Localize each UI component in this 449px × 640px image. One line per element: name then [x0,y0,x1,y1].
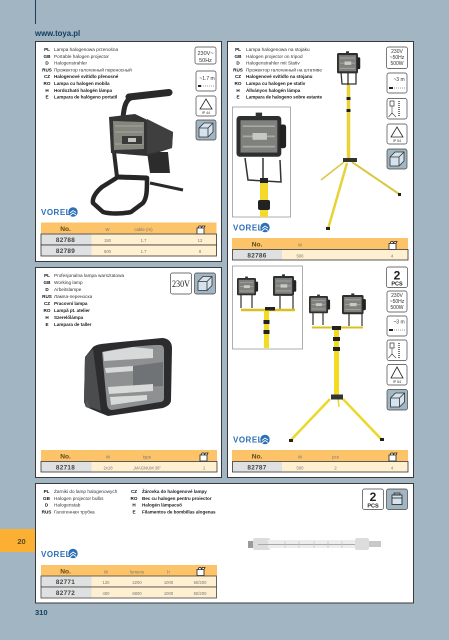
language list, right column [131,487,216,514]
table: 82787: No. [252,454,262,460]
language list: Halogenové svítidlo na stojanu [246,74,313,79]
icon: packaging box [196,120,216,140]
logo: VOREL: VOREL [233,436,263,444]
language list: H [236,88,240,93]
inset photo: lamp head [232,107,290,217]
language list: Állványos halogén lámpa [246,87,301,93]
table: 82787: W [298,454,303,460]
icon: 2 pcs: PCS [391,282,403,288]
language list [42,47,132,100]
table: 82771 / 82772: 1000 [164,580,174,585]
language list, right column: E [132,510,136,514]
section tab: 20 [0,529,35,552]
language list: RO [44,308,51,313]
language list, left column: RUS [42,510,51,514]
table: 82718: 1 [203,466,206,470]
table: 82718: „MAGNUM 36" [133,466,161,470]
language list: Halogenstrahler mit Stativ [246,60,300,66]
table: 82718: 82718 [56,464,75,472]
icon: cable length: ~1.7 m [199,76,215,82]
language list: Working lamp [54,280,83,285]
language list: Szerelőlámpa [54,315,84,320]
inset photo: twin lamp head [232,266,302,349]
table: 82787: 4 [391,466,394,470]
language list [42,273,124,327]
language list, right column: RO [131,496,138,501]
table: 82788 / 82789: cable (m) [134,227,153,232]
language list, left column: Żarniki do lamp halogenowych [54,488,118,494]
table: 82788 / 82789: W [105,227,110,232]
table: 82788 / 82789: 150 [104,238,112,243]
table: 82771 / 82772: 400 [102,591,110,596]
language list: E [45,322,49,327]
language list: E [45,94,49,100]
icon: voltage [387,291,407,312]
language list, left column: Галогенная трубка [54,510,95,514]
language list: RUS [42,68,52,72]
table: 82718 [41,450,217,472]
table: 82771 / 82772: 1000 [164,591,174,596]
icon: cable length: ~3 m [393,77,405,83]
language list: Halogen projector on tripod [246,54,303,59]
icon: 230V: 230V [172,279,190,289]
table: 82788 / 82789: 1.7 [141,238,147,243]
language list: Halogenstrahler [54,60,88,66]
icon: 2 pcs: PCS [367,504,379,510]
table: 82788 / 82789: 82788 [56,237,75,244]
logo: VOREL: VOREL [41,208,71,217]
panel: halogen bulbs [36,484,414,603]
icon: voltage: 230V [391,49,403,55]
language list: Lampa halogenowa na stojaku [246,47,310,52]
panel: portable halogen projector [36,42,222,262]
icon: IP54 [387,364,407,385]
table: 82788 / 82789: 82789 [56,248,75,255]
icon: voltage [195,47,216,64]
table: 82786: 4 [391,254,394,258]
table: 82788 / 82789: 1.7 [141,249,147,254]
language list: Лампа-переноска [54,294,93,299]
language list: Lampa cu halogen pe stativ [246,81,306,86]
icon: voltage: ~50Hz [390,55,405,61]
table: 82786: 82786 [247,252,267,260]
icon: voltage: 500W [390,61,404,67]
table: 82718: type [143,454,152,460]
product photo: portable projector [93,92,183,214]
icon: IP44: IP 54 [393,139,401,143]
product photo: halogen tube [248,538,381,550]
language list, left column [42,488,118,514]
product photo: work lamp [84,338,172,416]
language list: RUS [233,68,243,72]
language list: H [45,88,49,93]
table: 82771 / 82772: h [167,570,170,574]
language list: Lampara de taller [54,322,92,327]
language list: Lampa halogenowa przenośna [54,47,119,52]
page margin rule [34,0,36,24]
table: 82771 / 82772: lumens [130,570,145,574]
table: 82771 / 82772 [41,565,217,598]
table: 82787: 2 [334,466,337,470]
icon: 2 pcs: 2 [370,490,377,504]
table: 82788 / 82789: 12 [198,238,203,243]
table: 82771 / 82772: 120 [102,580,110,585]
icon: voltage: ~50Hz [390,299,405,305]
icon: packaging box [387,390,408,410]
language list, right column: Bec cu halogen pentru proiector [142,496,212,501]
language list: CZ [235,74,241,79]
table: 82788 / 82789: 8 [199,249,202,254]
language list, left column: PL [44,489,50,494]
icon: 2 pcs: 2 [394,268,401,282]
icon: voltage: 230V [391,293,403,299]
icon: height [387,340,407,360]
icon: cable length [387,316,407,336]
language list, right column: H [132,502,136,508]
language list, left column: D [45,502,49,508]
language list: Lampă pt. atelier [54,308,90,313]
language list: RUS [42,294,52,299]
language list, left column: Halogen projector bulbs [54,496,104,501]
table: 82787: 500 [296,466,304,470]
icon: IP44: IP 44 [202,111,210,115]
icon: 2 pcs [386,267,408,288]
language list: D [236,60,240,66]
icon: 230V [170,273,192,294]
language list, right column: Žárovka do halogenové lampy [142,487,207,494]
icon: packaging box [194,273,216,294]
product photo: twin tripod lamp [289,293,384,442]
language list, right column: Halogén lámpacső [142,502,182,508]
table: 82786: No. [252,242,262,248]
language list: Lampara de halogeno sobre estante [246,94,322,100]
language list: GB [44,280,51,285]
table: 82771 / 82772: 2200 [132,580,142,585]
table: 82788 / 82789: 500 [104,249,112,254]
table: 82787 [232,450,408,472]
icon: IP44 [387,124,407,144]
language list: Profesjonalna lampa warsztatowa [54,273,124,278]
language list, left column: Halogenstab [54,502,81,508]
language list: CZ [44,301,50,306]
page number: 310 [35,608,48,617]
language list [233,47,322,100]
language list: Hordozható halogén lámpa [54,88,112,93]
table: 82771 / 82772: 6800 [132,591,142,596]
panel: tripod lamps [228,42,414,478]
icon: IP54: IP 54 [393,380,401,384]
language list: Pracovní lampa [54,301,88,306]
table: 82771 / 82772: 82772 [56,590,75,597]
table: 82787: 82787 [247,464,267,472]
language list: RO [235,81,242,86]
language list: H [45,315,49,320]
icon: cable length: ~3 m [393,320,405,326]
icon: IP44 [196,96,216,116]
icon: voltage: 230V~ [197,51,214,57]
table: 82718: No. [60,454,71,460]
icon: packaging box [387,149,407,169]
language list: Arbeitslampe [54,287,82,292]
table: 82771 / 82772: 50/200 [194,591,207,596]
language list: CZ [44,74,50,79]
language list: E [236,94,240,100]
table: 82771 / 82772: 50/200 [194,580,207,585]
website heading: www.toya.pl [34,29,80,38]
language list: Прожектор галогенный на штативе [246,66,322,72]
logo: VOREL: VOREL [41,550,71,559]
language list: PL [235,47,241,52]
table: 82788 / 82789: No. [60,226,71,233]
language list: Halogenové svítidlo přenosné [54,74,119,79]
language list: D [45,60,49,66]
icon: height [387,98,407,119]
language list: GB [235,54,242,59]
language list: Lampa cu halogen mobila [54,81,110,86]
table: 82788 / 82789 [41,222,216,256]
table: 82786: W [298,242,303,248]
table: 82718: W [106,454,111,460]
icon: voltage: 500W [390,305,404,311]
table: 82771 / 82772: W [104,570,109,574]
language list: PL [44,47,50,52]
icon: voltage [386,47,408,68]
icon: cable length [387,73,407,93]
language list: Portable halogen projector [54,54,109,59]
product photo: tripod lamp [321,51,401,230]
table: 82786: 500 [296,254,304,258]
table: 82771 / 82772: No. [60,568,71,576]
language list, right column: Filamentos de bombillas alogenas [142,510,216,514]
icon: voltage: 50Hz [199,58,212,64]
icon: cable length [196,71,216,91]
language list: PL [44,273,50,278]
icon: 2 pcs [362,489,384,510]
table: 82786 [232,238,408,260]
section tab: 20: 20 [17,537,26,546]
language list: D [45,287,49,292]
language list: Lampara de halógeno portatil [54,94,117,100]
table: 82718: 2x18 [103,466,113,470]
language list: RO [44,81,51,86]
icon: blister pack [386,489,408,510]
table: 82771 / 82772: 82771 [56,579,75,586]
language list: GB [44,54,51,59]
table: 82787: pcs [332,454,340,460]
language list: Прожектор галогенный переносный [54,66,132,72]
language list, right column: CZ [131,489,137,494]
language list, left column: GB [43,496,51,501]
logo: VOREL: VOREL [233,224,263,232]
panel: working lamp [36,268,222,478]
